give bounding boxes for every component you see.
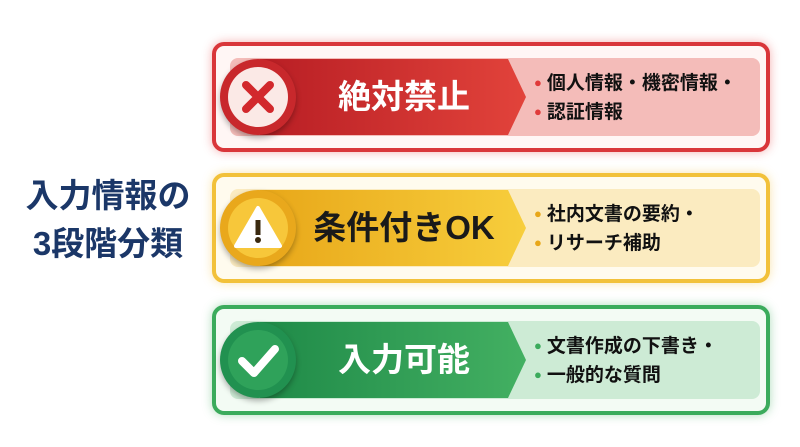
light area — [230, 189, 760, 267]
items: ● 一般的な質問 — [534, 365, 661, 386]
panel: forbidden — [212, 42, 770, 152]
banner: 絶対禁止 — [338, 78, 470, 115]
icon: warning — [220, 190, 296, 266]
items — [534, 336, 718, 386]
panel: allowed — [212, 305, 770, 415]
banner: 入力可能 — [338, 341, 470, 378]
banner — [216, 190, 526, 272]
icon: cross — [220, 59, 296, 135]
items: ● 社内文書の要約・ — [534, 204, 699, 225]
banner: 条件付きOK — [313, 209, 495, 246]
light area — [230, 58, 760, 136]
items — [534, 204, 699, 254]
items: ● 文書作成の下書き・ — [534, 336, 718, 357]
items: ● 認証情報 — [534, 102, 623, 123]
light area — [230, 321, 760, 399]
banner — [216, 322, 526, 404]
banner — [216, 58, 526, 142]
items: ● リサーチ補助 — [534, 233, 661, 254]
icon: check — [220, 322, 296, 398]
title: 入力情報の — [26, 177, 190, 214]
title — [26, 177, 190, 262]
items — [534, 72, 737, 123]
items: ● 個人情報・機密情報・ — [534, 73, 737, 94]
panel: conditional — [212, 173, 770, 283]
title: 3段階分類 — [33, 225, 183, 262]
